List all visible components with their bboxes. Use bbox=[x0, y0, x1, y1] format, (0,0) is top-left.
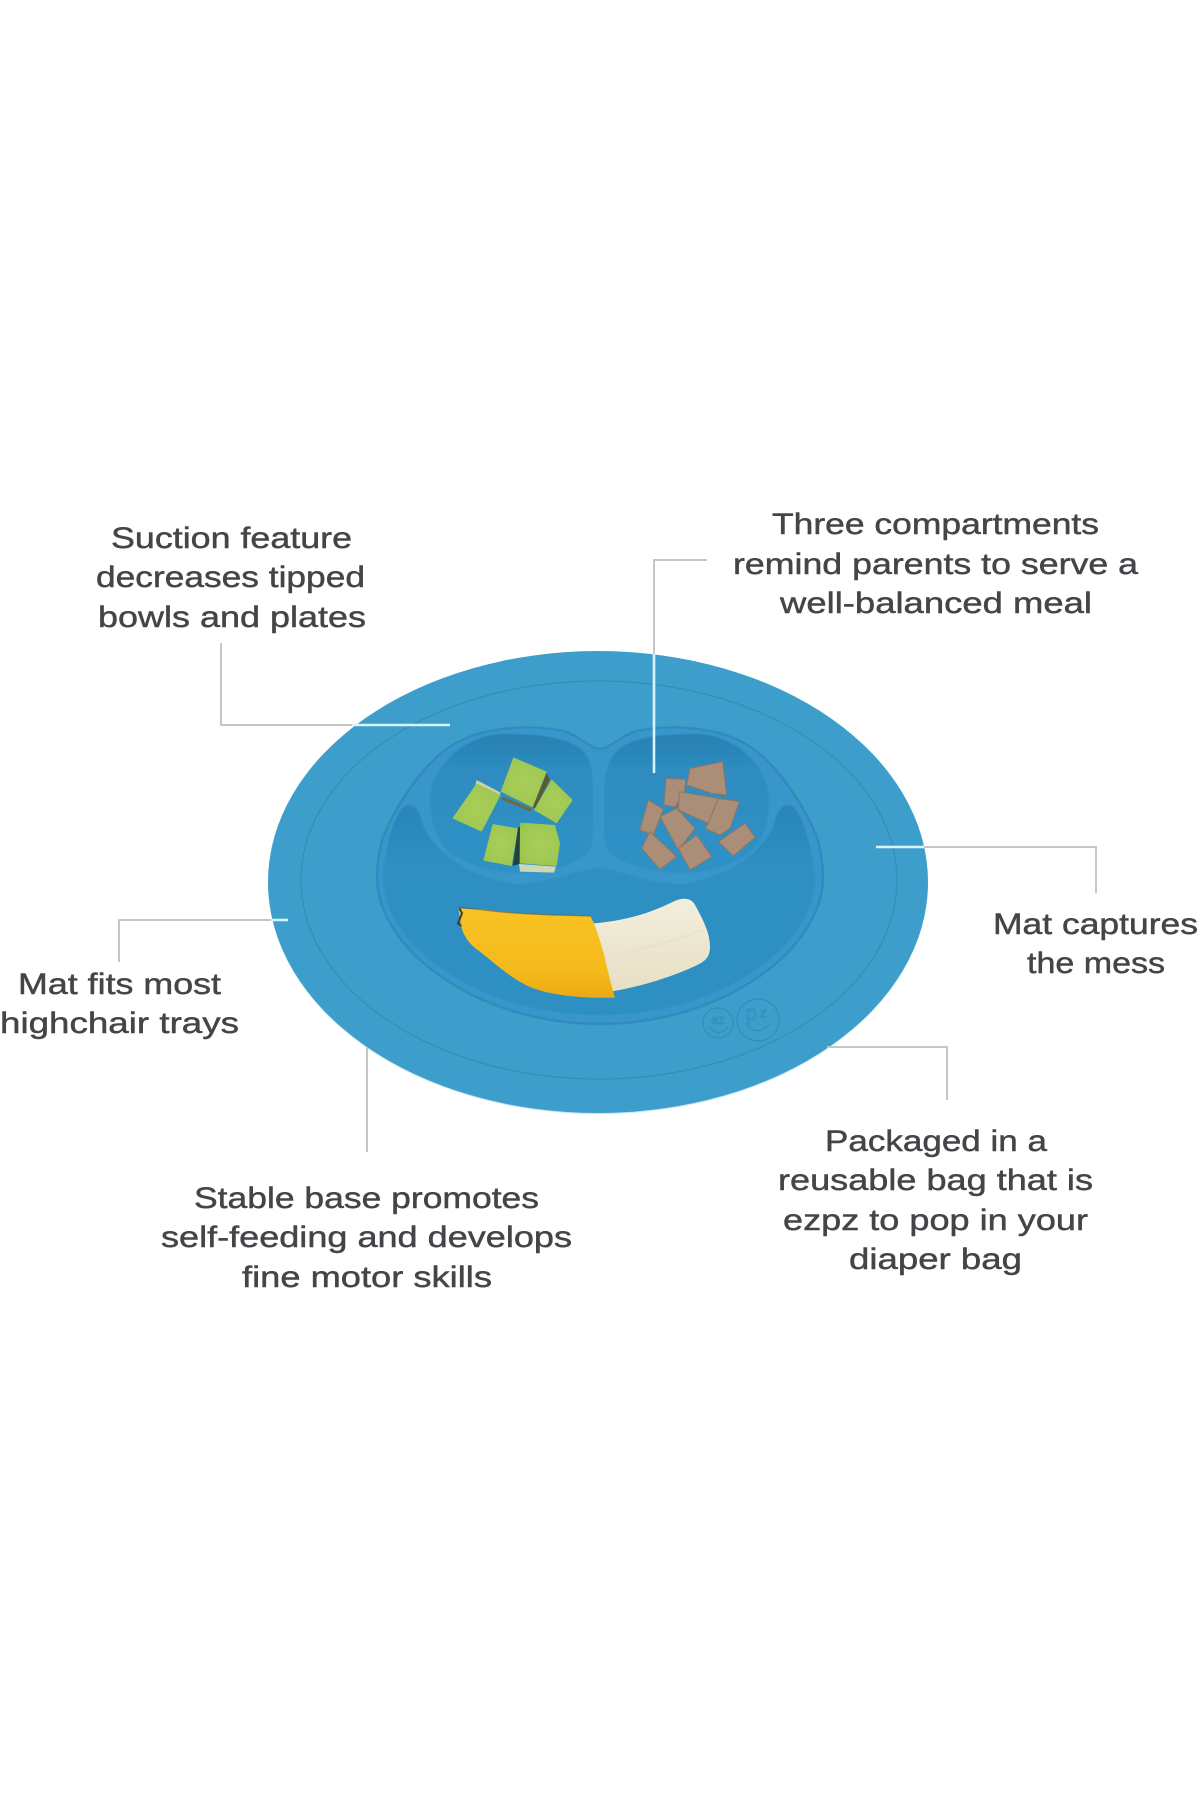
text: highchair: highchair trays bbox=[0, 1007, 239, 1040]
right bowl bbox=[604, 734, 769, 873]
text: bag: Packaged in a bbox=[825, 1125, 1047, 1158]
leader line: mess bbox=[876, 847, 1096, 893]
text: bag bbox=[778, 1125, 1093, 1276]
text: stable base: fine motor skills bbox=[242, 1261, 492, 1294]
text: bag: diaper bag bbox=[849, 1243, 1022, 1276]
callout: suction feature bbox=[96, 522, 450, 725]
text: compartments bbox=[733, 508, 1138, 620]
text: bag: ezpz to pop in your bbox=[783, 1204, 1088, 1237]
text: highchair bbox=[0, 968, 239, 1040]
leader line: stable base bbox=[366, 1047, 368, 1152]
embossed ezpz logo: z bbox=[760, 1005, 766, 1020]
leader line: highchair bbox=[119, 920, 288, 962]
green avocado cubes bbox=[452, 757, 573, 873]
leader line: bag bbox=[827, 1047, 947, 1100]
callout: three compartments bbox=[654, 508, 1138, 773]
text: highchair: Mat fits most bbox=[18, 968, 222, 1001]
panel: silicone feeding mat bbox=[268, 651, 928, 1114]
tray lower compartment: banana section bbox=[383, 805, 815, 1015]
mat body bbox=[268, 651, 928, 1114]
text: mess bbox=[993, 908, 1198, 980]
callout: mat fits highchair trays bbox=[0, 920, 288, 1040]
text: mess: Mat captures bbox=[993, 908, 1198, 941]
callout: reusable bag bbox=[778, 1047, 1093, 1276]
leader line: suction bbox=[221, 643, 450, 725]
text: suction: decreases tipped bbox=[96, 561, 365, 594]
text: compartments: remind parents to serve a bbox=[733, 548, 1138, 581]
callout: stable base bbox=[161, 1047, 572, 1294]
text: compartments: well-balanced meal bbox=[779, 587, 1092, 620]
brown meat cubes bbox=[640, 762, 755, 870]
text: stable base: self-feeding and develops bbox=[161, 1221, 572, 1254]
leader line: compartments bbox=[654, 560, 707, 773]
embossed ezpz logo: ez bbox=[711, 1012, 725, 1027]
text: suction: bowls and plates bbox=[98, 601, 366, 634]
text: stable base bbox=[161, 1182, 572, 1294]
smiley tray rim bbox=[377, 727, 823, 1024]
text: mess: the mess bbox=[1027, 947, 1165, 980]
text: stable base: Stable base promotes bbox=[194, 1182, 539, 1215]
callout: mat captures the mess bbox=[876, 847, 1198, 980]
text: bag: reusable bag that is bbox=[778, 1164, 1093, 1197]
banana bbox=[458, 899, 710, 998]
left bowl bbox=[430, 734, 593, 873]
text: suction: Suction feature bbox=[111, 522, 352, 555]
embossed ezpz logo: p bbox=[746, 1003, 757, 1025]
embossed ezpz logo bbox=[703, 999, 779, 1041]
text: suction bbox=[96, 522, 366, 634]
text: compartments: Three compartments bbox=[772, 508, 1099, 541]
